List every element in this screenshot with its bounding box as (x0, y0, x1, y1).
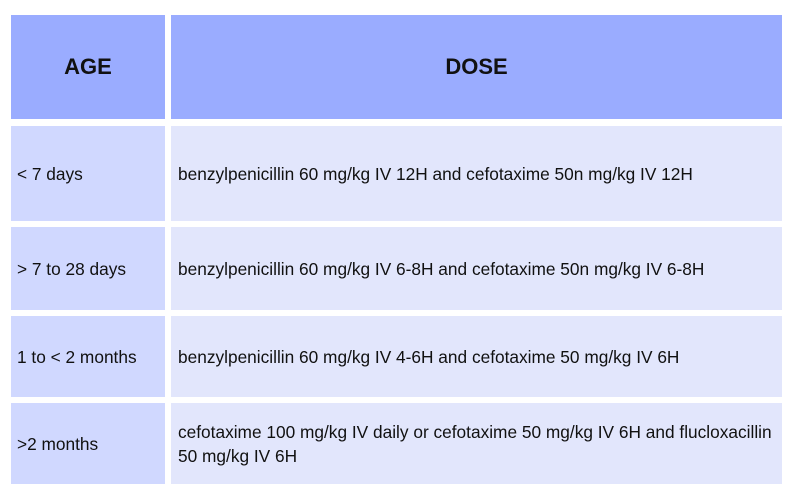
header: age: AGE (64, 54, 112, 79)
header: dose: DOSE (445, 54, 508, 79)
header: age (11, 15, 165, 119)
row 3 dose: benzylpenicillin 60 mg/kg IV 4-6H and cefotaxime 50 mg/kg IV 6H (178, 346, 679, 366)
row 1 dose (171, 126, 782, 221)
row 3 age (11, 316, 165, 397)
row 3 age: 1 to < 2 months (17, 346, 137, 366)
row 1 dose: benzylpenicillin 60 mg/kg IV 12H and cefotaxime 50n mg/kg IV 12H (178, 164, 693, 184)
row 1 age (11, 126, 165, 221)
row 2 dose: benzylpenicillin 60 mg/kg IV 6-8H and cefotaxime 50n mg/kg IV 6-8H (178, 258, 704, 278)
header: dose (171, 15, 782, 119)
row 4 dose (171, 403, 782, 484)
row 1 age: < 7 days (17, 164, 83, 184)
row 2 age: > 7 to 28 days (17, 258, 126, 278)
row 4 dose: cefotaxime 100 mg/kg IV daily or cefotaxime 50 mg/kg IV 6H and flucloxacillin 50 mg/kg IV 6H (178, 422, 772, 466)
row 3 dose (171, 316, 782, 397)
row 2 dose (171, 227, 782, 310)
row 4 age: >2 months (17, 434, 98, 454)
row 4 age (11, 403, 165, 484)
row 2 age (11, 227, 165, 310)
